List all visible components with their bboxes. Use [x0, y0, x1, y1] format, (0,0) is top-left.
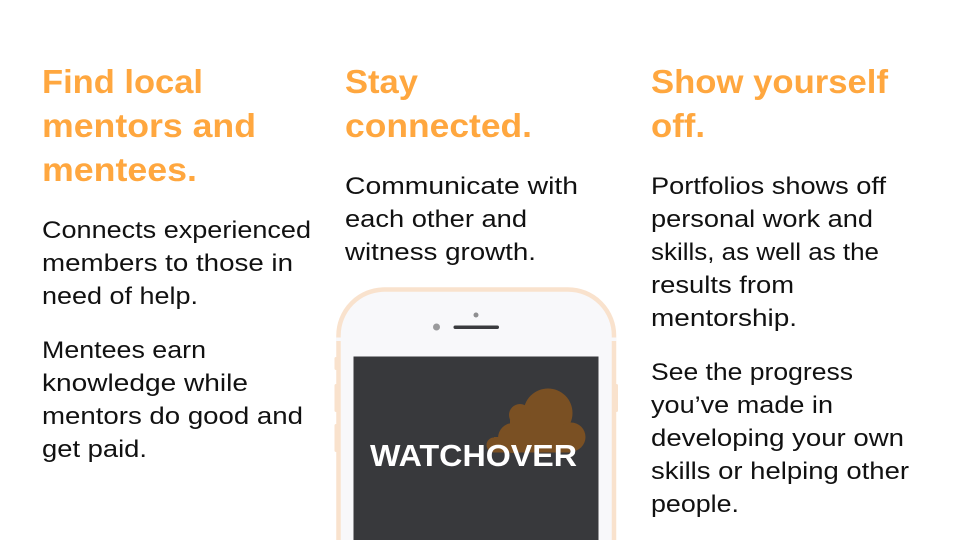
text block: see the progress: skills or helping other: [651, 458, 909, 485]
heading: stay connected: connected.: [345, 107, 532, 144]
text block: portfolios: results from: [651, 272, 794, 299]
text block: connects members: [42, 217, 311, 310]
heading: find local mentors and mentees: mentees.: [42, 151, 197, 188]
text block: see the progress: See the progress: [651, 359, 853, 386]
icon: cloud logo: [486, 388, 586, 453]
text block: portfolios: Portfolios shows off: [651, 173, 886, 200]
phone screen: [354, 356, 598, 540]
phone mockup: [334, 290, 618, 540]
heading: find local mentors and mentees: [42, 63, 256, 188]
heading: show yourself off: [651, 63, 889, 144]
heading: find local mentors and mentees: mentors and: [42, 107, 256, 144]
text block: see the progress: people.: [651, 491, 739, 518]
text block: mentees earn knowledge: Mentees earn: [42, 337, 206, 364]
text block: mentees earn knowledge: [42, 337, 303, 463]
text block: see the progress: you’ve made in: [651, 392, 833, 419]
text block: connects members: members to those in: [42, 250, 293, 277]
text block: mentees earn knowledge: get paid.: [42, 436, 147, 463]
camera: [433, 324, 440, 330]
text block: portfolios: personal work and: [651, 206, 873, 233]
heading: show yourself off: off.: [651, 107, 705, 144]
panel: show yourself off: [651, 63, 909, 518]
heading: show yourself off: Show yourself: [651, 63, 889, 100]
panel: find local mentors: [42, 63, 311, 463]
text block: mentees earn knowledge: knowledge while: [42, 370, 248, 397]
text block: portfolios: [651, 173, 886, 332]
text block: see the progress: developing your own: [651, 425, 904, 452]
text block: mentees earn knowledge: mentors do good and: [42, 403, 303, 430]
text block: see the progress: [651, 359, 909, 518]
phone body: [338, 290, 614, 540]
antenna band right: [612, 338, 616, 341]
logo wordmark: WATCHOVER: [370, 438, 577, 473]
text block: portfolios: mentorship.: [651, 305, 797, 332]
text block: communicate: each other and: [345, 206, 527, 233]
heading: stay connected: Stay: [345, 63, 419, 100]
text block: communicate: witness growth.: [344, 239, 536, 266]
text block: communicate: [344, 173, 578, 266]
heading: find local mentors and mentees: Find local: [42, 63, 203, 100]
antenna band left: [336, 338, 341, 341]
text block: portfolios: skills, as well as the: [651, 239, 879, 266]
heading: stay connected: [345, 63, 532, 144]
phone side buttons: [334, 357, 618, 452]
text block: communicate: Communicate with: [345, 173, 578, 200]
speaker: [454, 326, 499, 329]
text block: connects members: need of help.: [42, 283, 198, 310]
text block: connects members: Connects experienced: [42, 217, 311, 244]
sensor: [474, 312, 478, 318]
panel: stay connected: [334, 63, 618, 540]
